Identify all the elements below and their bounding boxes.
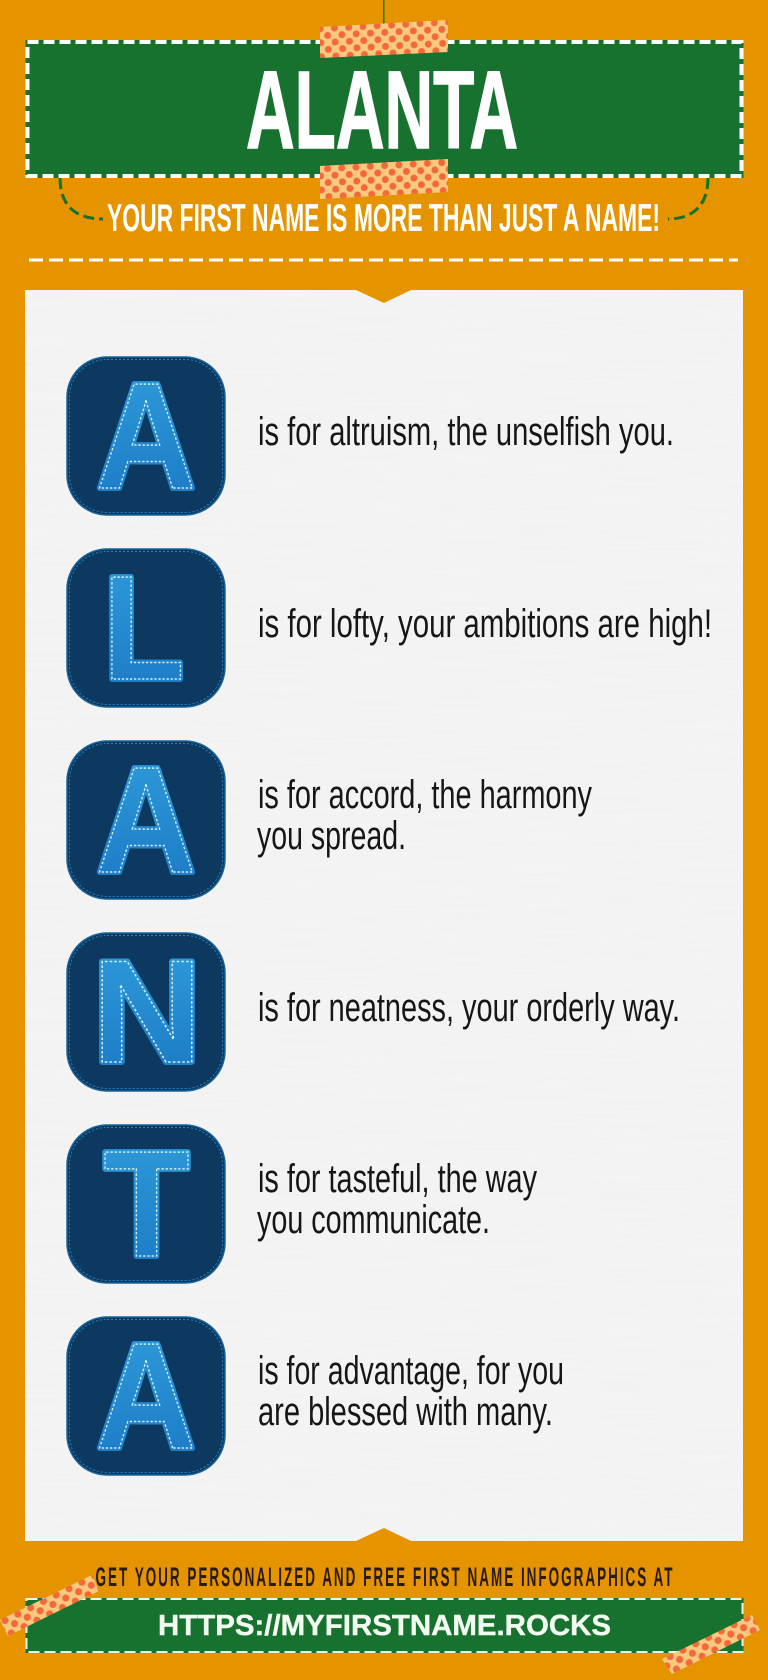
footer url: HTTPS://MYFIRSTNAME.ROCKS [158, 1610, 611, 1642]
icon: letter L [67, 546, 225, 711]
row 4: N [67, 930, 680, 1093]
text: tasteful: is for tasteful, the way [258, 1157, 537, 1201]
icon: letter T [67, 1119, 225, 1288]
icon: letter A [67, 351, 225, 520]
icon: letter N: N [92, 930, 202, 1093]
row 3: A [67, 735, 592, 904]
top tape [320, 20, 448, 58]
icon: letter N: N [92, 930, 202, 1093]
text: accord: is for accord, the harmony [258, 773, 592, 817]
icon: letter A: A [96, 735, 196, 904]
right curved dashed connector [668, 178, 708, 219]
title: ALANTA [246, 49, 518, 172]
left footer tape [0, 1575, 99, 1636]
footer call to action: GET YOUR PERSONALIZED AND FREE FIRST NAME INFOGRAPHICS AT [96, 1562, 672, 1592]
row 2: L [67, 546, 712, 711]
text: advantage [258, 1349, 564, 1434]
icon: letter A: A [96, 1311, 196, 1480]
icon: letter N [67, 930, 225, 1093]
right footer tape [662, 1615, 760, 1674]
panel: letters [25, 290, 743, 1541]
icon: letter A [67, 735, 225, 904]
text: accord [257, 773, 592, 858]
icon: letter T: T [104, 1119, 190, 1288]
hanging string [383, 0, 384, 24]
white dashed divider [29, 258, 738, 262]
icon: letter A: A [96, 1311, 196, 1480]
icon: letter A [67, 1311, 225, 1480]
icon: letter A: A [96, 351, 196, 520]
icon: letter L: L [103, 546, 184, 711]
text: accord: you spread. [257, 814, 406, 858]
bottom tape [320, 159, 448, 199]
footer banner [26, 1598, 744, 1653]
row 6: A [67, 1311, 564, 1480]
title banner [26, 40, 744, 178]
icon: letter T: T [104, 1119, 190, 1288]
text: advantage: are blessed with many. [258, 1390, 553, 1434]
row 5: T [67, 1119, 537, 1288]
row 1: A [67, 351, 674, 520]
text: tasteful [257, 1157, 537, 1242]
left curved dashed connector [60, 178, 103, 219]
text: advantage: is for advantage, for you [258, 1349, 564, 1393]
icon: letter L: L [103, 546, 184, 711]
icon: letter A: A [96, 351, 196, 520]
icon: letter A: A [96, 735, 196, 904]
text: tasteful: you communicate. [257, 1198, 490, 1242]
